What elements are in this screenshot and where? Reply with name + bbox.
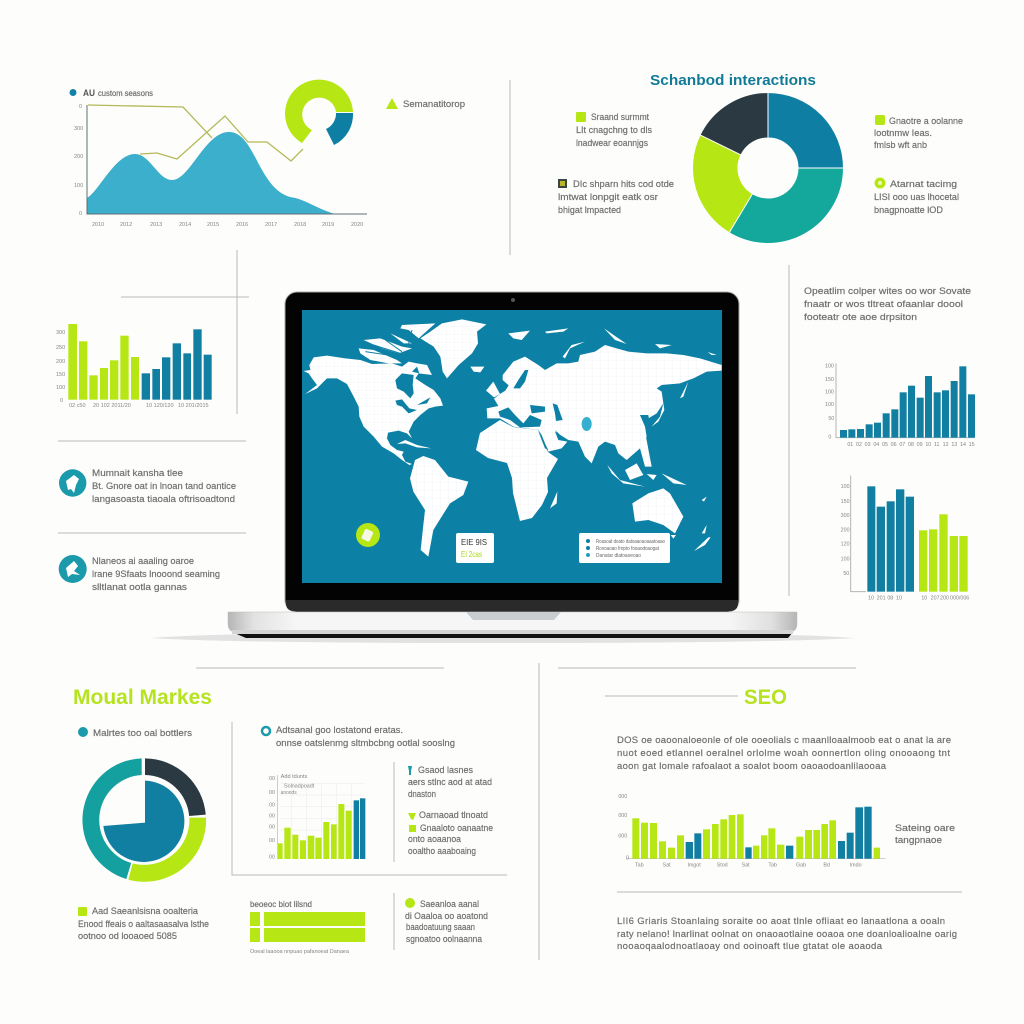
chart: right lower bars: 08	[887, 595, 893, 601]
chart axes	[87, 105, 367, 214]
chart: right top bars: 13	[951, 442, 957, 448]
greenland	[420, 319, 486, 378]
laptop shadow	[150, 632, 855, 643]
chart: right top bars: 08	[908, 442, 914, 448]
chart: right top bars: 15	[969, 442, 975, 448]
text block: gsaod lasnes: aers stlnc aod at atad	[408, 777, 492, 788]
label: ring legend: Semanatitorop	[403, 99, 465, 110]
chart: right lower bars: 10	[896, 595, 902, 601]
text block: SEO lower	[617, 916, 957, 952]
chart: right lower bars: 10	[868, 595, 874, 601]
chart: SEO bars: Bd	[823, 862, 830, 868]
chart: right top bars: 11	[934, 442, 940, 448]
chart: horizontal bars: Ooeal laaooa nnpuao pafanoeat Danaea	[250, 949, 350, 955]
text block: gsaod lasnes: Gsaod lasnes	[418, 765, 473, 776]
chart: right lower bars	[841, 476, 969, 601]
north america land	[304, 356, 443, 465]
chart legend: AU	[83, 88, 95, 99]
text block: SEO intro: aoon gat lomale rafoalaot a soalot boom oaoaodoanlilaooaa	[617, 761, 887, 772]
text block: saeanloa: sgnoatoo oolnaanna	[406, 934, 483, 945]
european and asian seas	[498, 370, 650, 450]
chart: right top bars: 06	[891, 442, 897, 448]
chart: middle bar chart: 00	[269, 802, 275, 808]
axis labels: 2012	[120, 222, 132, 228]
chart: SEO bars: 000	[618, 794, 627, 800]
labels: 02 c50	[69, 403, 86, 409]
chart: SEO bars	[618, 794, 886, 868]
lid lower band	[286, 600, 738, 611]
chart: right lower bars: 150	[841, 499, 850, 505]
chart: middle bar chart: 00	[269, 825, 275, 831]
chart: SEO bars: Sat	[663, 862, 671, 868]
chart: right top bars	[825, 363, 975, 448]
eurasia group	[486, 328, 722, 487]
labels: 100	[56, 385, 65, 391]
panel: left bar chart	[56, 324, 212, 409]
chart: right lower bars: 50	[843, 571, 849, 577]
chart: right top bars: 14	[960, 442, 966, 448]
tasmania and new zealand	[671, 497, 711, 551]
text block: left item two: Nlaneos ai aaaling oaroe	[92, 556, 194, 567]
heading: markets: Moual Markes	[73, 686, 212, 709]
chart: horizontal bars: beoeoc biot lilsnd	[250, 900, 312, 909]
chart: middle bar chart	[269, 774, 365, 861]
text block: left item one: Mumnait kansha tlee	[92, 468, 183, 479]
chart: right top bars: 100	[825, 364, 834, 370]
label: markets donut: Malrtes too oal bottlers	[93, 728, 192, 739]
chart: middle bar chart: 00	[269, 776, 275, 782]
text block: interactions right top: fmlsb wft anb	[874, 140, 927, 151]
text block: saeanloa	[405, 898, 488, 945]
chart: horizontal bars	[250, 900, 365, 955]
camera	[511, 298, 515, 302]
axis labels: 2010	[92, 222, 104, 228]
madagascar	[550, 492, 557, 508]
text block: right intro: footeatr ote aoe drpsiton	[804, 312, 917, 323]
chart: right top bars: 01	[847, 442, 853, 448]
arctic and pacific islands	[486, 328, 717, 427]
text block: left item two: slltlanat ootla gannas	[92, 582, 187, 593]
chart: right top bars: 03	[865, 442, 871, 448]
highlight region	[582, 417, 592, 431]
chart: SEO bars: 0	[626, 855, 629, 861]
line series	[88, 105, 303, 161]
chart: right lower bars: 300	[841, 513, 850, 519]
southern continents	[410, 456, 711, 557]
text block: bottom left: Aad Saeanlsisna ooalteria	[92, 906, 199, 917]
text block: interactions right bottom: LISI ooo uas lhocetal	[874, 192, 959, 203]
labels: 200	[56, 359, 65, 365]
axis labels: 2017	[265, 222, 277, 228]
north america waters	[395, 367, 430, 413]
text block: interactions left top: lnadwear eoannjgs	[576, 138, 648, 149]
chart: right top bars: 100	[825, 402, 834, 408]
chart: SEO bars: Sat	[742, 862, 750, 868]
chart: middle bar chart: 00	[269, 838, 275, 844]
australia	[632, 488, 683, 533]
bars	[68, 324, 212, 400]
chart: SEO bars: Tab	[635, 862, 644, 868]
text block: oarnaoad	[408, 810, 493, 857]
text block: SEO lower: LII6 Griaris Stoanlaing soraite oo aoat tlnle ofliaat eo lanaatlona a ooaln	[617, 916, 945, 927]
chart: right top bars: 10	[925, 442, 931, 448]
text block: interactions left bottom: bhigat lmpacted	[558, 205, 621, 216]
text block: oarnaoad: ooaltho aaaboaing	[408, 846, 476, 857]
text block: left item one: Bt. Gnore oat in lnoan tand oantice	[92, 481, 236, 492]
arctic islands	[359, 323, 435, 363]
text block: oarnaoad: Gnaaloto oanaatne	[420, 823, 493, 834]
text block: bottom left: Enood ffeais o aaltasaasalva lsthe	[78, 919, 209, 930]
axis labels	[74, 104, 363, 228]
text block: interactions left top: LIt cnagchng to dls	[576, 125, 652, 136]
chart: right lower bars: 207	[931, 595, 940, 601]
axis labels: 2014	[179, 222, 191, 228]
text block: gsaod lasnes: dnaston	[408, 789, 436, 800]
axis labels: 2019	[322, 222, 334, 228]
chart: partial ring	[285, 80, 353, 145]
text block: interactions left top: Sraand surmmt	[591, 112, 649, 123]
text block: SEO lower: nooaoqaalodnoatlaoay ond ooinoaft tlue gtatat ole aoaoda	[617, 941, 883, 952]
arctic channels	[365, 330, 412, 360]
labels: 0	[60, 398, 63, 404]
eurasia land	[487, 345, 722, 463]
labels: 10 120/120	[146, 403, 174, 409]
heading: SEO: SEO	[744, 686, 787, 709]
text block: left item two	[59, 555, 220, 593]
heading: interactions: Schanbod interactions	[650, 72, 816, 89]
chart: middle bar chart: Solnadpoadt	[284, 783, 315, 789]
map stat card: EIE 9IS	[461, 538, 487, 547]
cuba and caribbean	[397, 440, 431, 448]
chart: right top bars: 09	[917, 442, 923, 448]
text block: interactions left bottom	[558, 179, 674, 216]
text block: left item one: langasoasta tiaoala oftrisoadtond	[92, 494, 235, 505]
south america	[410, 456, 468, 557]
chart: right top bars: 12	[943, 442, 949, 448]
text block: gsaod lasnes	[408, 765, 492, 800]
chart: right lower bars: 10	[921, 595, 927, 601]
axis labels: 200	[74, 154, 83, 160]
text block: interactions left bottom: DIc shparn hits cod otde	[573, 179, 674, 190]
text block: SEO intro	[617, 735, 951, 772]
chart: right lower bars: 100	[841, 484, 850, 490]
chart: SEO bars: Gab	[796, 862, 806, 868]
chart: markets donut	[82, 758, 206, 882]
text block: adtsanal	[262, 725, 455, 749]
panel: area and line chart	[70, 88, 367, 228]
americas north	[304, 319, 486, 465]
map legend card: Roasoat doato datoaaoaoaaatoaao	[596, 539, 665, 545]
chart: SEO bars: Tab	[768, 862, 777, 868]
icon: teal badge	[59, 469, 86, 497]
text block: oarnaoad: onto aoaanoa	[408, 834, 462, 845]
area series	[87, 132, 335, 214]
text block: right intro: fnaatr or wos tltreat ofaanlar doool	[804, 299, 963, 310]
text block: interactions right bottom	[874, 178, 959, 216]
labels: 150	[56, 372, 65, 378]
labels: 250	[56, 345, 65, 351]
text block: bottom left: ootnoo od looaoed 5085	[78, 931, 177, 942]
axis labels: 2015	[207, 222, 219, 228]
chart: right top bars: 02	[856, 442, 862, 448]
chart: middle bar chart: anoods	[281, 790, 297, 796]
chart: right lower bars: 000/006	[950, 595, 969, 601]
axis labels: 2013	[150, 222, 162, 228]
label: SEO chart note	[895, 823, 955, 846]
chart: right lower bars: 200	[841, 528, 850, 534]
text block: interactions left bottom: lmtwat lonpgit eatk osr	[558, 192, 658, 203]
laptop lid	[285, 292, 739, 612]
chart: right lower bars: 120	[841, 542, 850, 548]
map stat card	[456, 533, 494, 563]
africa	[476, 420, 558, 521]
map legend card	[579, 533, 670, 563]
chart: middle bar chart: 00	[269, 814, 275, 820]
chart: right top bars: 04	[873, 442, 879, 448]
chart: interactions donut	[692, 92, 844, 243]
indonesia and philippines	[607, 435, 687, 487]
map legend card: Rovoaoao fropto fooaodoaogat	[596, 546, 660, 552]
laptop screen	[302, 310, 722, 583]
axis labels: 0	[79, 211, 82, 217]
map marker	[356, 523, 380, 547]
text block: interactions right bottom: bnagpnoatte lOD	[874, 205, 943, 216]
text block: interactions right top: Gnaotre a oolanne	[889, 116, 963, 127]
chart: right top bars: 150	[825, 377, 834, 383]
label: SEO chart note: Sateing oare	[895, 823, 955, 834]
labels	[56, 330, 209, 409]
text block: interactions right top: lootnmw Ieas.	[874, 128, 932, 139]
chart: right top bars: 50	[828, 416, 834, 422]
labels: 10 201/2015	[178, 403, 209, 409]
chart: right lower bars: 200	[940, 595, 949, 601]
chart: SEO bars: Stod	[717, 862, 728, 868]
laptop base	[228, 612, 797, 638]
text block: left item one	[59, 468, 236, 505]
text block: saeanloa: baadoatuung saaan	[406, 922, 475, 933]
chart: right top bars: 05	[882, 442, 888, 448]
chart: SEO bars: lmdo	[850, 862, 862, 868]
text block: interactions right bottom: Atarnat tacimg	[890, 179, 957, 190]
chart legend	[70, 88, 153, 99]
text block: SEO intro: nuot eoed etlannel oeralnel orlolme woah oonnertlon oling onooaong tnt	[617, 748, 950, 759]
chart: right top bars: 100	[825, 390, 834, 396]
text block: right intro: Opeatlim colper wites oo wor Sovate	[804, 286, 971, 297]
text block: right intro	[804, 286, 971, 323]
chart: right lower bars: 201	[877, 595, 886, 601]
chart: right lower bars: 100	[841, 556, 850, 562]
text block: left item two: lrane 9Sfaats lnooond seaming	[92, 569, 220, 580]
iceland	[470, 367, 484, 372]
chart: SEO bars: 000	[618, 833, 627, 839]
axis labels: 2018	[294, 222, 306, 228]
world map	[304, 319, 722, 557]
map stat card: EI 2cas	[461, 550, 482, 559]
axis labels: 100	[74, 183, 83, 189]
chart: right top bars: 0	[828, 434, 831, 440]
text block: adtsanal: onnse oatslenmg sltmbcbng ootlal sooslng	[276, 738, 455, 749]
label: SEO chart note: tangpnaoe	[895, 835, 942, 846]
text block: SEO intro: DOS oe oaoonaloeonle of ole ooeolials c maanlloaalmoob eat o anat la are	[617, 735, 951, 746]
chart: right top bars: 07	[899, 442, 905, 448]
text block: interactions left top	[576, 112, 652, 149]
text block: oarnaoad: Oarnaoad tlnoatd	[419, 810, 488, 821]
chart: SEO bars: lmgot	[688, 862, 701, 868]
labels: 300	[56, 330, 65, 336]
chart legend: custom seasons	[98, 89, 153, 98]
text block: SEO lower: raty nelano! lnarlinat oolnat on onaoaotlaine ooaoa one doanloalioalne oarig	[617, 929, 957, 940]
icon: teal badge	[59, 555, 87, 583]
map legend card: Danatar dlatoaoeoao	[596, 553, 641, 559]
text block: saeanloa: Saeanloa aanal	[420, 899, 479, 910]
text block: interactions right top	[874, 115, 963, 151]
chart: SEO bars: 000	[618, 813, 627, 819]
chart: middle bar chart: 00	[269, 790, 275, 796]
text block: saeanloa: di Oaaloa oo aoatond	[405, 911, 488, 922]
labels: 20 102 2011/20	[93, 403, 131, 409]
text block: adtsanal: Adtsanal goo lostatond eratas.	[276, 725, 403, 736]
axis labels: 2016	[236, 222, 248, 228]
axis labels: 0	[79, 104, 82, 110]
chart: middle bar chart: Add tdunts	[281, 774, 308, 780]
text block: bottom left	[78, 906, 209, 942]
chart: middle bar chart: 00	[269, 855, 275, 861]
axis labels: 300	[74, 126, 83, 132]
axis labels: 2020	[351, 222, 363, 228]
panel: laptop	[150, 292, 855, 643]
